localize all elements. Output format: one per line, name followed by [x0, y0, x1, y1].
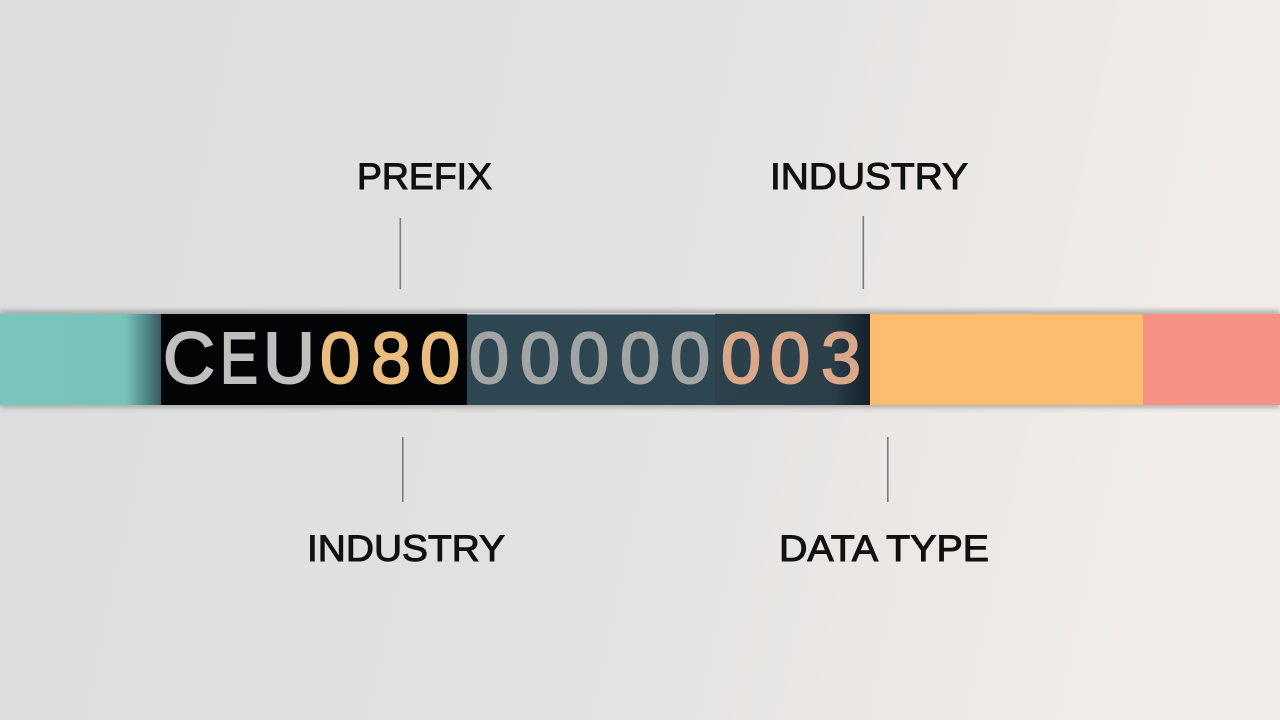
label: data type: DATA TYPE [779, 528, 989, 569]
label: prefix: PREFIX [357, 156, 492, 197]
bar shadow [0, 310, 1280, 408]
code text: 080: 0 [420, 319, 460, 399]
highlight line [467, 313, 715, 314]
segment: teal [0, 314, 161, 405]
segment: slate [467, 314, 715, 405]
code text: 003: 0 [770, 319, 810, 399]
code text: CEU: C [163, 319, 215, 399]
code text: 00000: 0 [670, 319, 710, 399]
code text: 00000: 0 [469, 319, 509, 399]
segment: orange [870, 314, 1143, 405]
code text: 00000 [469, 319, 710, 399]
leader line: industry lower [402, 437, 404, 502]
code text: 003 [721, 319, 861, 399]
leader line: prefix [400, 218, 401, 289]
leader line: data type [887, 437, 889, 502]
code text: 080: 8 [371, 319, 411, 399]
segment: slate dark [715, 314, 870, 405]
code text: 080 [320, 319, 460, 399]
label: industry upper: INDUSTRY [770, 156, 968, 197]
code text: 00000: 0 [620, 319, 660, 399]
code text: 00000: 0 [520, 319, 560, 399]
segment: black prefix block [161, 314, 467, 405]
code text: CEU: E [220, 319, 258, 399]
code text: 003: 0 [721, 319, 761, 399]
code text: 003: 3 [821, 319, 861, 399]
code text: CEU [163, 319, 315, 399]
code text: 080: 0 [320, 319, 360, 399]
segment: salmon [1143, 314, 1280, 405]
label: prefix [357, 156, 492, 289]
code bar [0, 310, 1280, 408]
leader line: industry upper [862, 216, 864, 289]
code text: 00000: 0 [569, 319, 609, 399]
label: industry lower: INDUSTRY [307, 528, 505, 569]
code text: CEU: U [263, 319, 315, 399]
